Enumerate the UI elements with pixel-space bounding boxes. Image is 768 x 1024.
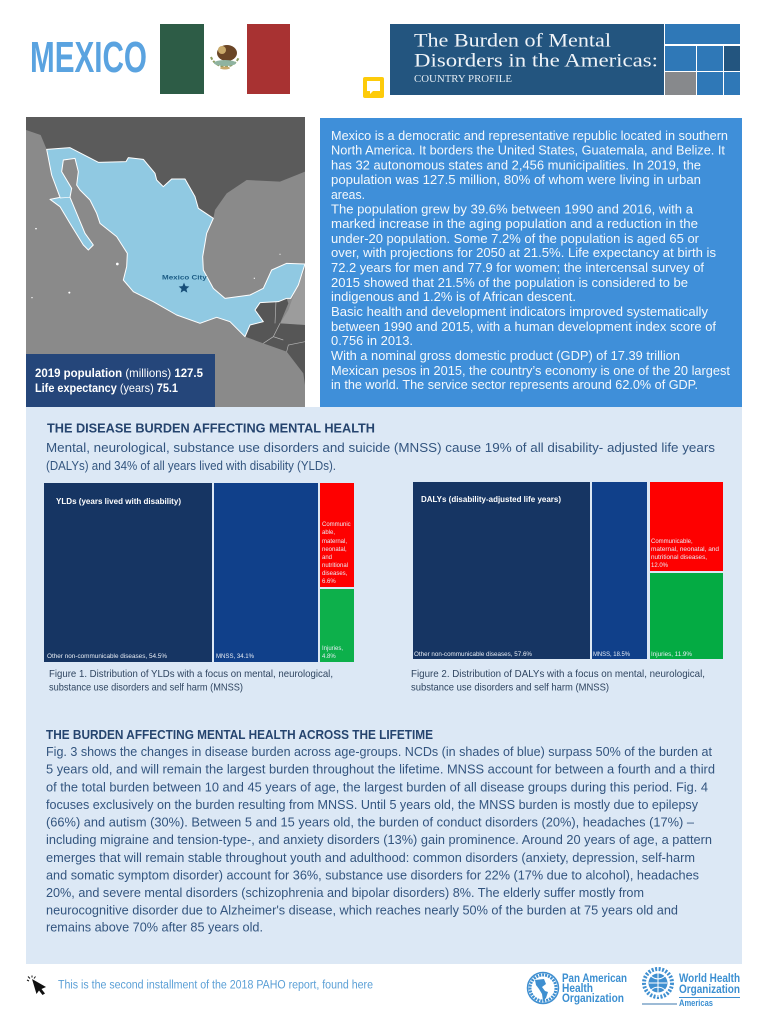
chart: YLD treemap: and bbox=[322, 555, 332, 561]
chart: YLD treemap: neonatal, bbox=[322, 547, 347, 553]
panel: country description: With a nominal gross domestic product (GDP) of 17.39 trillion bbox=[331, 348, 680, 363]
chart: DALY treemap: 12.0% bbox=[651, 563, 669, 569]
panel: country description: over, with projections for 2050 at 21.5%. Life expectancy at birth is bbox=[331, 245, 717, 260]
text block: disease burden intro: Mental, neurological, substance use disorders and suicide (MNSS) cause 19% of all disability- adjusted life years bbox=[46, 440, 716, 455]
panel: country description: in the world. The service sector represents around 62.0% of GDP. bbox=[331, 377, 698, 392]
logo: World Health Organization Americas bbox=[642, 969, 740, 1008]
panel: country description: Basic health and development indicators improved systematically bbox=[331, 304, 708, 319]
chart: YLD treemap: 6.6% bbox=[322, 579, 336, 585]
panel: country description: areas. bbox=[331, 187, 365, 202]
panel: country description: North America. It borders the United States, Guatemala, and Belize. It bbox=[331, 143, 725, 158]
logo: World Health Organization Americas: Americas bbox=[679, 998, 713, 1008]
header banner: COUNTRY PROFILE bbox=[414, 74, 512, 85]
chart: YLD treemap bbox=[44, 483, 354, 662]
panel: country description: population was 127.5 million, 80% of whom were living in urban bbox=[331, 172, 701, 187]
stats box bbox=[26, 354, 215, 407]
text block: disease burden intro: (DALYs) and 34% of all years lived with disability (YLDs). bbox=[46, 458, 336, 473]
text block: lifetime burden: 20%, and severe mental disorders (schizophrenia and bipolar disorders) 8%. The elderly suffer mostly from bbox=[46, 885, 644, 900]
chart: DALY treemap: Communicable, bbox=[651, 539, 693, 545]
chart: YLD treemap: maternal, bbox=[322, 539, 347, 545]
map of Mexico: Mexico City bbox=[162, 276, 208, 282]
caption: figure 2: Figure 2. Distribution of DALYs with a focus on mental, neurological, bbox=[411, 668, 705, 680]
caption: figure 1: Figure 1. Distribution of YLDs with a focus on mental, neurological, bbox=[49, 668, 333, 680]
icon: flag of Mexico bbox=[160, 24, 290, 94]
panel: country description bbox=[320, 118, 742, 407]
icon: cursor click bbox=[27, 976, 46, 995]
chart: DALY treemap: nutritional diseases, bbox=[651, 555, 707, 561]
logo: World Health Organization Americas: Organization bbox=[679, 982, 740, 996]
panel: country description: The population grew by 39.6% between 1990 and 2016, with a bbox=[331, 202, 694, 216]
header banner: The Burden of Mental bbox=[414, 30, 611, 52]
panel: country description: Mexico is a democratic and representative republic located in southern bbox=[331, 128, 728, 143]
panel: burden background bbox=[26, 407, 742, 964]
logo: World Health Organization Americas: World Health bbox=[679, 971, 740, 985]
stats box: Life expectancy (years) 75.1 bbox=[35, 381, 178, 395]
text block: lifetime burden: including migraine and tension-type-, and anxiety disorders (13%) gain prominence. Around 20 years of age, a pattern bbox=[46, 832, 712, 847]
logo: Pan American Health Organization bbox=[528, 972, 627, 1005]
header banner bbox=[390, 24, 740, 95]
panel: country description: Mexican pesos in 2015, the country’s economy is one of the 20 largest bbox=[331, 363, 730, 378]
chart: DALY treemap: Injuries, 11.9% bbox=[651, 652, 693, 658]
chart: YLD treemap: diseases, bbox=[322, 571, 348, 577]
panel: country description: under-20 population. Some 7.2% of the population is aged 65 or bbox=[331, 231, 700, 246]
text block: lifetime burden: 5 years old, and will remain the largest burden throughout the lifetime. MNSS account for between a fourth and a third bbox=[46, 762, 715, 777]
caption: figure 1 bbox=[49, 668, 333, 694]
panel: country description: has 32 autonomous states and 2,456 municipalities. In 2019, the bbox=[331, 157, 701, 172]
chart: DALY treemap: maternal, neonatal, and bbox=[651, 547, 719, 553]
chart: YLD treemap: nutritional bbox=[322, 563, 348, 569]
caption: figure 2: substance use disorders and self harm (MNSS) bbox=[411, 682, 609, 694]
chart: YLD treemap: MNSS, 34.1% bbox=[216, 654, 255, 660]
panel: country description: marked increase in the aging population and a reduction in the bbox=[331, 216, 698, 231]
stats box: 2019 population (millions) 127.5 bbox=[35, 366, 203, 380]
chart: YLD treemap: 4.8% bbox=[322, 654, 336, 660]
text block: lifetime burden: of the total burden between 10 and 45 years of age, the largest burden of all disease groups during this period. Fig. 4 bbox=[46, 779, 708, 794]
heading: lifetime burden: THE BURDEN AFFECTING MENTAL HEALTH ACROSS THE LIFETIME bbox=[46, 727, 433, 742]
chart: YLD treemap: Other non-communicable diseases, 54.5% bbox=[47, 654, 168, 660]
chart: DALY treemap: Other non-communicable diseases, 57.6% bbox=[414, 652, 533, 658]
chart: DALY treemap bbox=[413, 482, 723, 659]
panel: country description: between 1990 and 2015, with a human development index score of bbox=[331, 319, 716, 334]
text block: disease burden intro bbox=[46, 440, 716, 473]
footer note: This is the second installment of the 2018 PAHO report, found here bbox=[58, 980, 373, 992]
chart: DALY treemap: DALYs (disability-adjusted life years) bbox=[421, 495, 561, 504]
chart: YLD treemap: Communic bbox=[322, 522, 351, 528]
text block: lifetime burden: and somatic symptom disorder) account for 36%, substance use disorders for 22% (17% due to alcohol), headaches bbox=[46, 867, 699, 882]
caption: figure 2 bbox=[411, 668, 705, 694]
chart: DALY treemap: MNSS, 18.5% bbox=[593, 652, 631, 658]
text block: lifetime burden: focuses exclusively on the burden resulting from MNSS. Until 5 years old, the MNSS burden is mostly due to epilepsy bbox=[46, 797, 698, 812]
text block: lifetime burden: (66%) and autism (30%). Between 5 and 15 years old, the burden of conduct disorders (20%), headaches (17%) – bbox=[46, 815, 695, 830]
logo: Pan American Health Organization: Health bbox=[562, 983, 593, 995]
chart: YLD treemap: Injuries, bbox=[322, 646, 343, 652]
text block: lifetime burden: remains above 70% after 85 years old. bbox=[46, 920, 263, 935]
icon: yellow comment bbox=[363, 77, 384, 98]
chart: YLD treemap: able, bbox=[322, 530, 335, 536]
logo: Pan American Health Organization: Pan American bbox=[562, 973, 627, 985]
panel: country description: 72.2 years for men and 77.9 for women; the intercensal survey of bbox=[331, 260, 704, 275]
logo: Pan American Health Organization: Organization bbox=[562, 993, 624, 1005]
map of Mexico bbox=[20, 110, 320, 410]
country name: MEXICO bbox=[30, 33, 147, 82]
text block: lifetime burden: emerges that will remain stable throughout youth and adulthood: common disorders (anxiety, depression, self-harm bbox=[46, 850, 695, 865]
text block: lifetime burden bbox=[46, 744, 715, 935]
heading: disease burden: THE DISEASE BURDEN AFFECTING MENTAL HEALTH bbox=[47, 420, 375, 436]
header banner: Disorders in the Americas: bbox=[414, 50, 658, 72]
panel: country description: 0.756 in 2013. bbox=[331, 333, 413, 348]
chart: YLD treemap: YLDs (years lived with disability) bbox=[56, 497, 181, 506]
text block: lifetime burden: neurocognitive disorder due to Alzheimer's disease, which reaches nearly 50% of the burden at 75 years old and bbox=[46, 902, 678, 917]
panel: country description: 2015 showed that 21.5% of the population is considered to be bbox=[331, 275, 688, 290]
panel: country description: indigenous and 1.2% is of African descent. bbox=[331, 289, 576, 304]
caption: figure 1: substance use disorders and self harm (MNSS) bbox=[49, 682, 243, 694]
text block: lifetime burden: Fig. 3 shows the changes in disease burden across age-groups. NCDs (in shades of blue) surpass 50% of the burden at bbox=[46, 744, 712, 759]
